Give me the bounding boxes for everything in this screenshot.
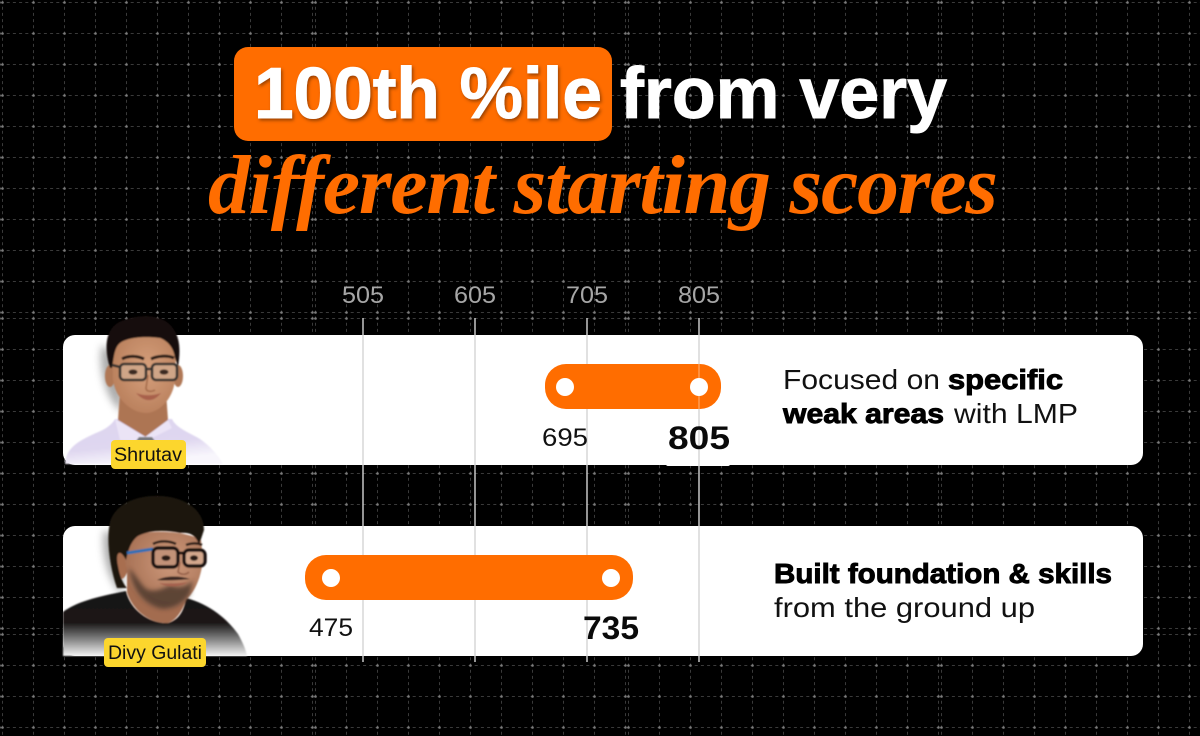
panel: Divy Gulati card: [63, 526, 1143, 656]
title: different starting scores: different starting scores: [208, 139, 998, 232]
text block: Divy note: Built foundation & skills: [774, 558, 1112, 589]
axis label 505: 505: [342, 282, 384, 309]
value 475: 475: [309, 614, 353, 642]
text block: Shrutav note: with LMP: [953, 398, 1078, 429]
axis label 805: 805: [678, 282, 720, 309]
axis label 705: 705: [566, 282, 608, 309]
text block: Divy note: from the ground up: [774, 592, 1035, 623]
text block: Shrutav note: weak areas: [782, 398, 944, 429]
text block: Shrutav note: [782, 364, 1078, 429]
name tag: Divy Gulati: Divy Gulati: [108, 643, 202, 664]
text block: Shrutav note: specific: [948, 364, 1063, 395]
portrait: Shrutav: [65, 316, 223, 469]
value 735: 735: [583, 610, 639, 646]
panel: Shrutav card: [63, 335, 1143, 465]
range bar: Shrutav 695 to 805: [545, 364, 721, 409]
title: [208, 47, 998, 232]
text block: Divy note: [774, 558, 1112, 623]
value 805: 805: [668, 420, 730, 456]
name tag: Shrutav: Shrutav: [114, 445, 183, 466]
axis label 605: 605: [454, 282, 496, 309]
title: from very: from very: [620, 54, 947, 134]
axis labels: [342, 282, 720, 309]
text block: Shrutav note: Focused on: [783, 364, 940, 395]
portrait: Divy Gulati: [63, 496, 247, 667]
name tag: Divy Gulati: [104, 638, 206, 667]
value 695: 695: [542, 424, 588, 452]
range bar: Divy 475 to 735: [305, 555, 633, 600]
title: 100th %ile: 100th %ile: [254, 54, 602, 134]
title highlight pill: [234, 47, 612, 141]
name tag: Shrutav: [111, 440, 186, 469]
axis gridlines: [363, 318, 699, 662]
